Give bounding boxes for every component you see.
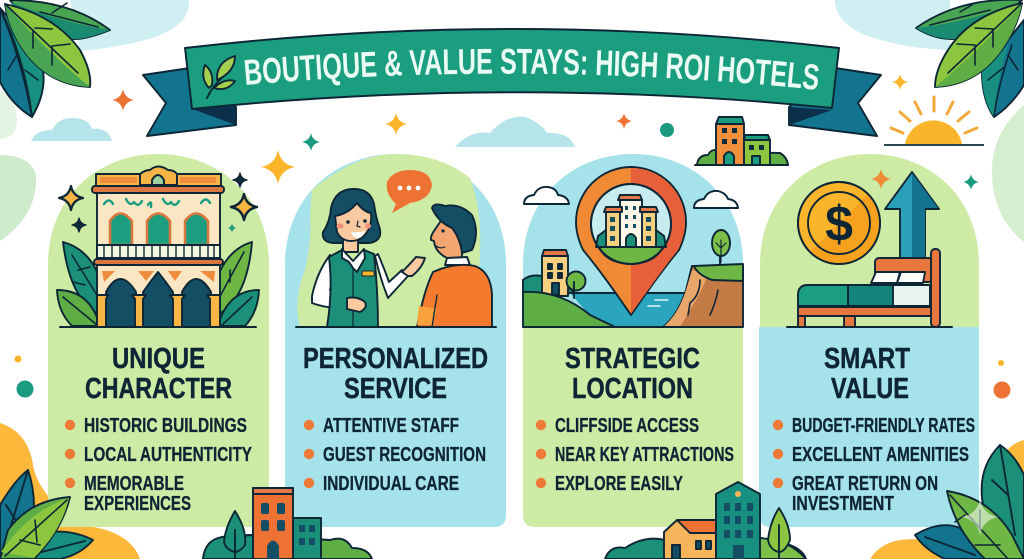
sleeves [312,255,347,309]
title: BOUTIQUE & VALUE STAYS: HIGH ROI HOTELS [244,48,818,90]
foliage [57,242,259,326]
upper arches [110,214,208,245]
bullet list: CLIFFSIDE ACCESS [555,415,699,437]
ribbon main band [185,29,839,109]
water [570,293,695,327]
bed [787,249,952,327]
bullet list: EXCELLENT AMENITIES [792,444,969,466]
heading [303,343,488,405]
icon: leaves bottom left [0,470,93,559]
heading [824,343,910,405]
bullet list: EXPLORE EASILY [555,473,683,495]
bullet list [536,415,734,495]
bullet list: MEMORABLE [84,473,184,495]
heading [85,343,232,405]
panel: strategic location [523,154,743,527]
ribbon tail right [789,68,881,136]
speech bubble [387,170,432,213]
sparkles and dots [14,74,1010,398]
bullet list: LOCAL AUTHENTICITY [84,444,252,466]
icon: city bottom right [605,482,806,559]
icon: sun [884,97,984,145]
banner ribbon [142,28,882,137]
icon: leaves top left [0,0,110,117]
icon: concierge and guest [296,170,496,327]
left house [523,250,615,327]
bullet list [65,415,252,515]
panel: personalized service [285,154,506,527]
bullet list: NEAR KEY ATTRACTIONS [555,444,734,466]
bullet list: GREAT RETURN ON [792,473,938,495]
heading: SERVICE [344,373,447,405]
icon: leaves top right [916,0,1024,117]
heading: UNIQUE [112,343,205,375]
heading: VALUE [831,373,909,405]
pin [576,167,686,315]
heading: LOCATION [572,373,693,405]
bullet list [304,415,486,495]
dollar coin [798,182,880,264]
watermark sparkle [962,499,998,535]
bullet list: ATTENTIVE STAFF [323,415,459,437]
woman [312,189,425,327]
tree [712,230,730,264]
clouds in background [31,117,575,147]
ribbon tail left [143,68,236,136]
bullet list: GUEST RECOGNITION [323,444,486,466]
man [417,204,492,327]
bullet list [773,415,975,515]
icon: laurel sprig [203,56,235,98]
icon: coin, arrow and bed [787,169,952,327]
cliff [663,264,743,327]
dollar coin: $ [825,196,853,252]
heading: CHARACTER [85,373,232,405]
heading: SMART [824,343,910,375]
growth arrow [885,172,939,258]
bullet list: EXPERIENCES [84,493,191,515]
panel: smart value [759,154,979,527]
heading [565,343,700,405]
icon: small hotel top [695,117,788,165]
icon: map scene [523,167,743,327]
lower arches [106,272,211,327]
icon: leaves bottom right [915,445,1024,559]
heading: STRATEGIC [565,343,700,375]
heading: PERSONALIZED [303,343,488,375]
hands [347,298,366,312]
icon: historic building [57,166,259,327]
green backdrop [297,154,480,327]
bullet list: INVESTMENT [792,493,894,515]
vest [327,250,378,327]
clouds [524,187,738,208]
panel: unique character [48,154,269,527]
balustrade [97,245,220,258]
bullet list: INDIVIDUAL CARE [323,473,459,495]
bullet list: HISTORIC BUILDINGS [84,415,247,437]
icon: city bottom left [203,488,372,559]
